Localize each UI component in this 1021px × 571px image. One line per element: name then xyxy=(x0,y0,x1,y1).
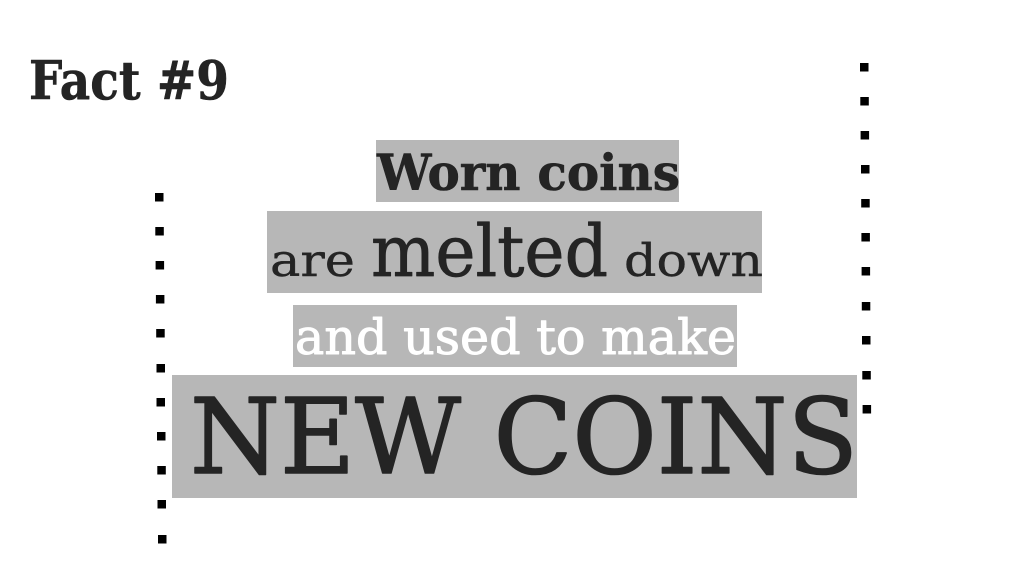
text line: are melted down xyxy=(267,210,763,293)
text line: Worn coins: Worn coins xyxy=(376,143,680,202)
text line: are melted down: are xyxy=(270,234,355,287)
title: Fact #9: Fact #9 xyxy=(29,50,229,112)
text line: NEW COINS: NEW COINS xyxy=(190,376,858,498)
dotted line: right xyxy=(860,63,871,414)
text line: are melted down: down xyxy=(624,234,763,287)
dotted line: left xyxy=(155,193,166,544)
text line: and used to make: and used to make xyxy=(295,309,736,366)
text line: are melted down: melted xyxy=(371,210,608,293)
